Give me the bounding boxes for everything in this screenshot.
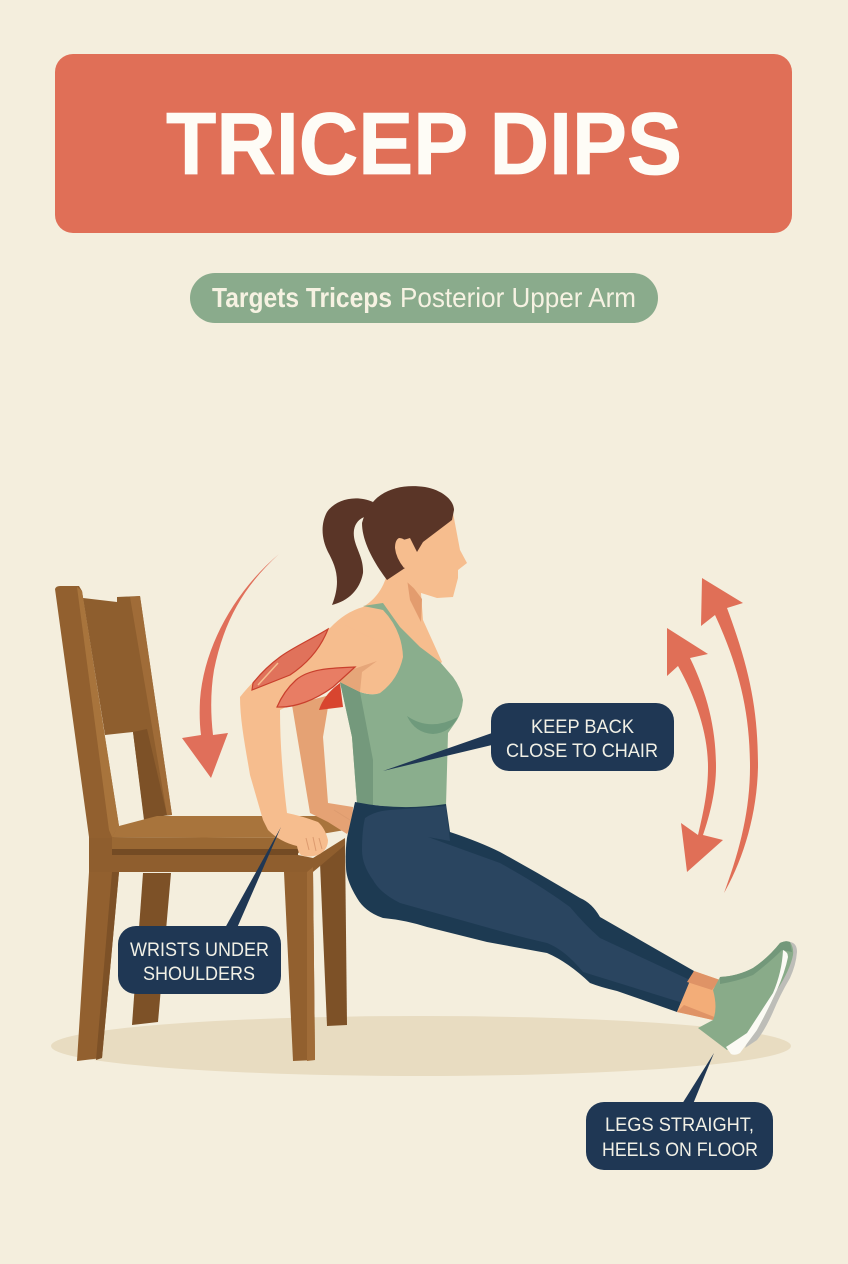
ponytail and hair bbox=[323, 486, 454, 605]
callout: wrists under shoulders bbox=[118, 827, 281, 994]
callout: legs straight, heels on floor: HEELS ON FLOOR bbox=[602, 1139, 758, 1161]
green tank top bbox=[340, 603, 463, 809]
title banner bbox=[55, 54, 792, 233]
callout: keep back close to chair bbox=[383, 703, 674, 771]
ankle bbox=[677, 971, 720, 1020]
woman doing dips bbox=[240, 486, 797, 1055]
title banner: TRICEP DIPS bbox=[166, 94, 682, 193]
chair left post and front leg bbox=[55, 586, 119, 1061]
floor shadow bbox=[51, 1016, 791, 1076]
chair back panel bbox=[83, 596, 172, 818]
neck and torso skin bbox=[330, 570, 442, 700]
sneaker bbox=[698, 941, 797, 1055]
chair back legs bbox=[132, 840, 347, 1026]
near arm bbox=[240, 625, 395, 856]
neck shadow bbox=[407, 579, 422, 622]
underbust shadow bbox=[407, 716, 458, 734]
armpit shadow bbox=[340, 661, 377, 692]
callout: wrists under shoulders: WRISTS UNDER bbox=[130, 939, 269, 961]
subtitle pill bbox=[190, 273, 658, 323]
head and face bbox=[385, 500, 467, 598]
subtitle pill: Targets Triceps bbox=[212, 282, 392, 313]
arrow: downward motion bbox=[182, 554, 279, 778]
chair front right leg bbox=[284, 872, 315, 1061]
arrows: up and down motion bbox=[667, 578, 758, 893]
subtitle pill: Posterior Upper Arm bbox=[400, 282, 636, 313]
callout: keep back close to chair: KEEP BACK bbox=[531, 716, 634, 738]
callout: wrists under shoulders: SHOULDERS bbox=[143, 963, 255, 985]
callout: keep back close to chair: CLOSE TO CHAIR bbox=[506, 740, 658, 762]
chair seat bbox=[112, 816, 345, 838]
callout: legs straight, heels on floor bbox=[586, 1053, 773, 1170]
fingers bbox=[306, 810, 350, 851]
wooden chair bbox=[55, 586, 347, 1061]
triceps muscles bbox=[252, 629, 355, 710]
back arm bbox=[292, 695, 353, 834]
ear bbox=[395, 538, 412, 568]
tank top shadow bbox=[340, 682, 373, 807]
callout: legs straight, heels on floor: LEGS STRAIGHT, bbox=[605, 1114, 754, 1136]
navy leggings bbox=[346, 802, 694, 1012]
